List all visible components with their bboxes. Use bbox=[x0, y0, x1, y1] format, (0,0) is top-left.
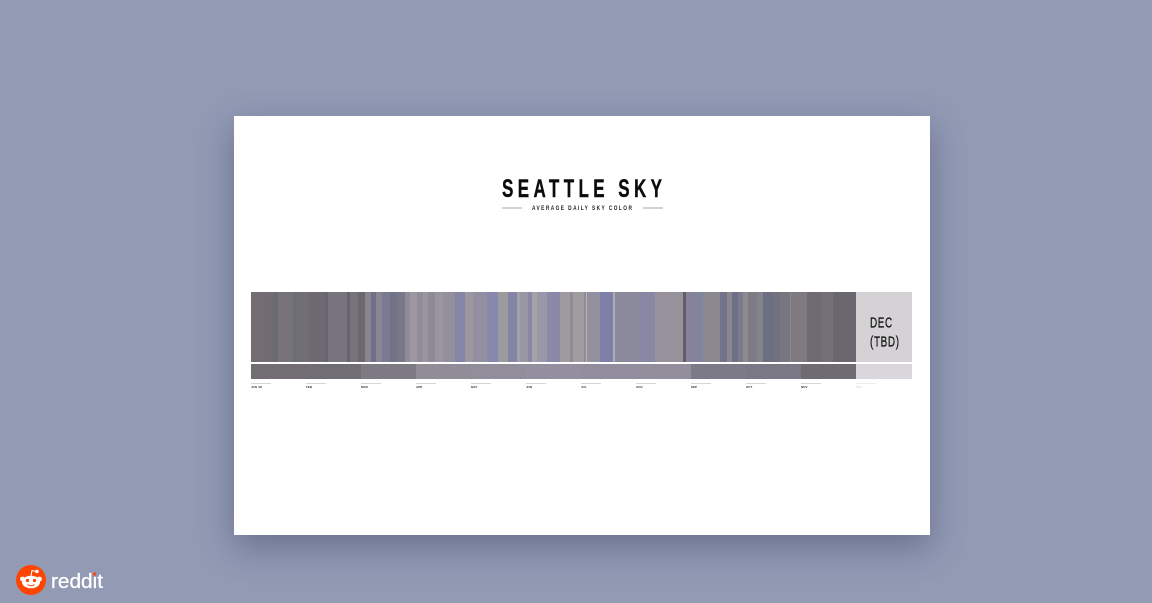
month labels: FEB bbox=[306, 385, 312, 389]
icon: reddit logo bbox=[16, 565, 46, 595]
reddit wordmark: reddit bbox=[51, 571, 103, 593]
month labels: JUN bbox=[526, 385, 532, 389]
subtitle with side rules: AVERAGE DAILY SKY COLOR bbox=[532, 206, 633, 212]
DEC label bbox=[870, 315, 900, 350]
chart: daily sky color stripes bbox=[251, 292, 856, 362]
panel: white card bbox=[234, 116, 930, 535]
month labels: NOV bbox=[801, 385, 808, 389]
DEC label: DEC bbox=[870, 315, 893, 331]
month labels: AUG bbox=[636, 385, 643, 389]
December average swatch bbox=[856, 364, 912, 379]
month labels: MAR bbox=[361, 385, 368, 389]
month labels: APR bbox=[416, 385, 422, 389]
DEC label: (TBD) bbox=[870, 334, 900, 350]
month labels: OCT bbox=[746, 385, 752, 389]
month labels: JAN '18 bbox=[251, 385, 262, 389]
chart: monthly average color band bbox=[251, 364, 856, 379]
month labels: MAY bbox=[471, 385, 477, 389]
panel: December to be determined bbox=[856, 292, 912, 362]
month labels: JUL bbox=[581, 385, 587, 389]
month labels: SEP bbox=[691, 385, 697, 389]
month labels: DEC bbox=[856, 385, 862, 389]
